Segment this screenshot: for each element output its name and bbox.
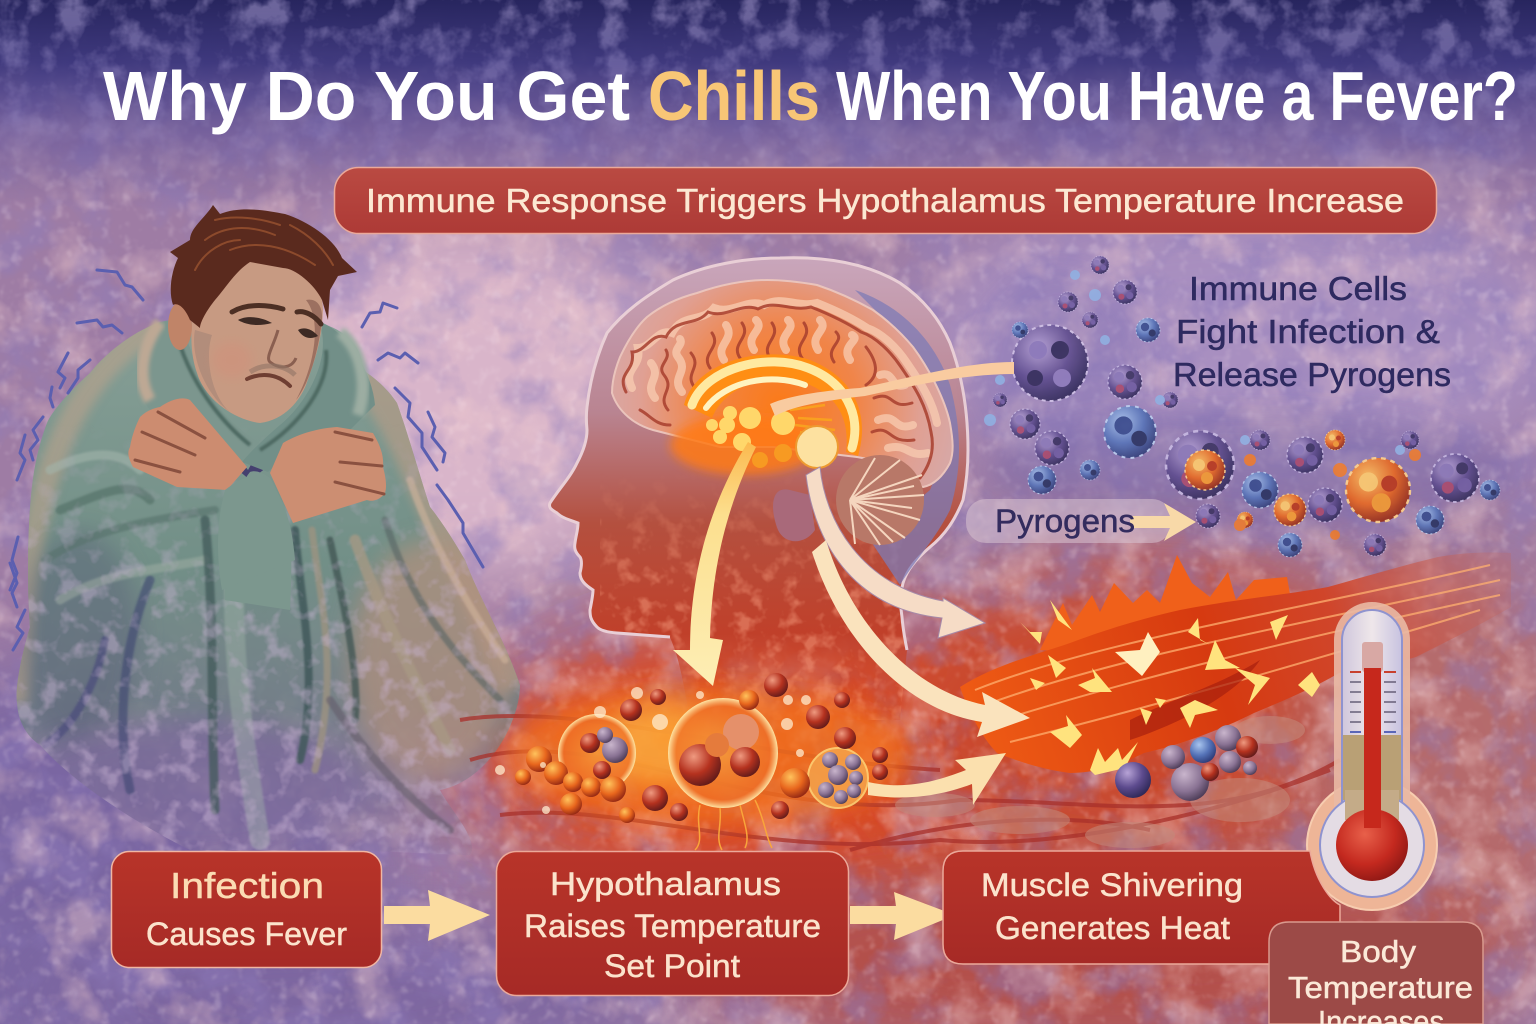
right blanket fold over wrist	[218, 476, 295, 590]
thermometer	[1307, 602, 1437, 910]
hand: left	[128, 398, 247, 490]
heading banner: immune response: Immune Response Triggers Hypothalamus Temperature Increase	[366, 182, 1404, 219]
arrow: immune cells to brain	[770, 362, 1014, 416]
sparks	[1020, 600, 1320, 775]
step: body temperature	[1269, 922, 1483, 1024]
dark cells	[1115, 725, 1258, 801]
step: body temperature: Body	[1340, 934, 1417, 969]
step: infection: Causes Fever	[146, 916, 347, 952]
dark neck hollow	[190, 370, 330, 480]
head outline	[549, 258, 968, 650]
step: infection	[112, 852, 382, 968]
brain	[612, 280, 953, 487]
heading banner: immune response	[334, 168, 1436, 234]
hypothalamus glow	[670, 405, 838, 475]
flames	[1040, 555, 1291, 660]
text: immune cells label: Immune Cells	[1189, 270, 1407, 307]
ear	[773, 489, 815, 541]
arrow: brainstem to upper muscle	[806, 467, 985, 638]
face	[168, 258, 323, 423]
arrow: brainstem to muscle	[812, 540, 1030, 737]
muscle with heat	[460, 552, 1511, 850]
arrow: infection to hypothalamus	[384, 890, 490, 941]
muscle body	[960, 552, 1511, 773]
title	[103, 57, 1518, 135]
pyrogens label with arrow	[966, 499, 1196, 543]
step: hypothalamus: Set Point	[604, 948, 740, 984]
step: muscle shivering: Generates Heat	[995, 910, 1230, 946]
arrow: hypothalamus to muscle	[850, 892, 955, 940]
text: immune cells label: Fight Infection &	[1176, 313, 1440, 350]
step: infection: Infection	[170, 865, 324, 906]
blanket collar	[138, 320, 375, 472]
figure: man shivering in blanket	[0, 205, 540, 860]
head mottling	[600, 502, 904, 720]
title: Chills	[648, 57, 820, 135]
arrow: cell cluster to muscle	[868, 753, 1006, 805]
arrow: brain to hypothalamus cells	[673, 442, 756, 686]
text: immune cells label: Release Pyrogens	[1173, 356, 1451, 393]
step: hypothalamus	[496, 852, 848, 996]
tissue fibres	[460, 716, 1340, 850]
shiver marks	[10, 270, 483, 650]
step: muscle shivering	[943, 851, 1340, 964]
blanket	[0, 322, 540, 860]
step: muscle shivering: Muscle Shivering	[981, 867, 1243, 903]
fingers	[135, 412, 384, 494]
cerebellum	[836, 455, 924, 545]
hair	[170, 205, 357, 328]
center blanket drape	[225, 471, 291, 610]
title: Why Do You Get	[103, 57, 630, 135]
back of skull shade	[855, 290, 959, 585]
pyrogens label with arrow: Pyrogens	[995, 503, 1135, 539]
cell cluster: hypothalamus reaction	[495, 673, 910, 850]
step: hypothalamus: Hypothalamus	[550, 866, 781, 902]
text: immune cells label	[1173, 270, 1451, 393]
head profile	[549, 258, 968, 720]
diagram: head with brain	[549, 258, 968, 720]
hand: right	[270, 427, 386, 523]
step: hypothalamus: Raises Temperature	[524, 908, 821, 944]
immune cells cluster	[975, 256, 1510, 557]
step: body temperature: Temperature	[1288, 970, 1473, 1005]
